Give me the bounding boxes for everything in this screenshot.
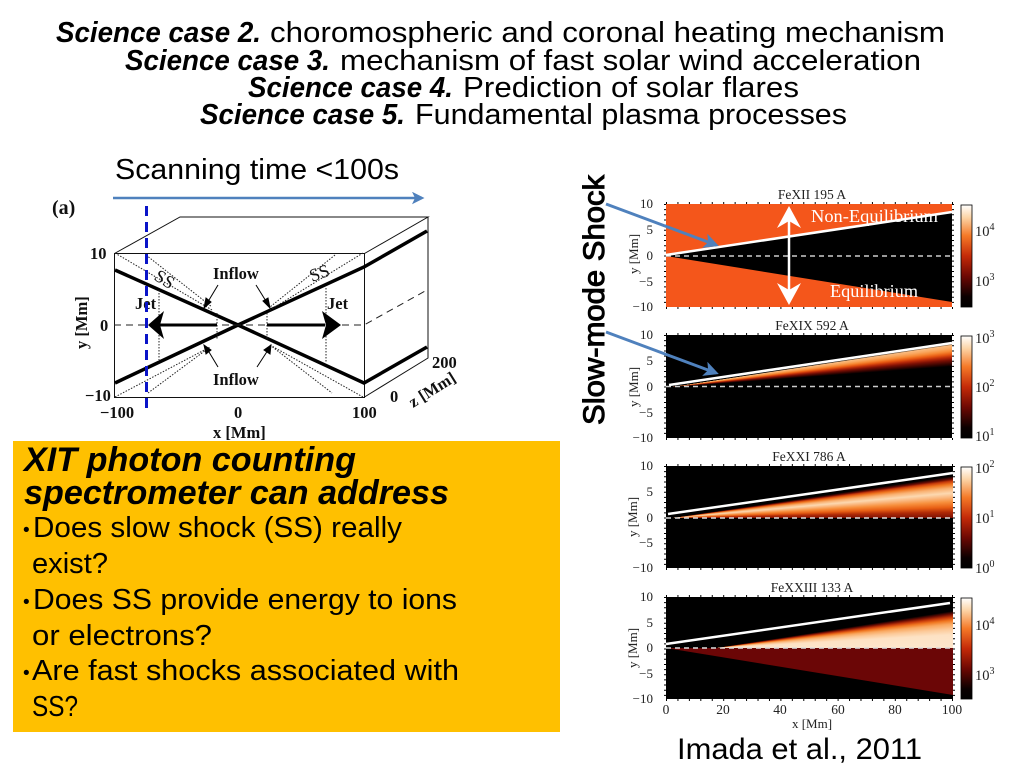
science case 3 text: mechanism of fast solar wind acceleration (340, 45, 921, 77)
inflow arrows (204, 285, 271, 367)
colour bar labels (975, 222, 994, 290)
colour bar labels: 4 (990, 616, 994, 627)
colour bar (961, 205, 972, 307)
y axis ticks: −10 (633, 430, 653, 445)
question 3 continuation: SS? (32, 691, 78, 723)
science case 2 label: Science case 2. (56, 17, 261, 49)
question 3: • (23, 663, 30, 684)
y axis ticks: 5 (646, 222, 653, 237)
y axis ticks: −10 (633, 691, 653, 706)
chart: FeXIX 592 A (626, 318, 994, 445)
science case 5 label: Science case 5. (200, 99, 405, 131)
midplane dashes (666, 647, 953, 649)
science case 3 label: Science case 3. (125, 45, 330, 77)
colour bar labels (975, 616, 994, 684)
diagram labels: Jet (135, 294, 157, 313)
chart title: FeXXI 786 A (772, 449, 846, 464)
colour bar labels: 10 (975, 618, 990, 634)
emission wedge (666, 466, 953, 518)
diagram labels: Jet (327, 294, 349, 313)
colour bar labels: 0 (990, 559, 994, 570)
x axis ticks: 0 (663, 702, 670, 717)
diagram labels (72, 244, 459, 442)
equilibrium label: Equilibrium (830, 281, 918, 301)
vertical label: slow-mode shock: Slow-mode Shock (578, 174, 611, 425)
midplane dashes (666, 386, 952, 388)
jet arrow left (148, 311, 217, 339)
heat map (666, 204, 952, 307)
chart title: FeXXIII 133 A (771, 580, 853, 595)
colour bar labels: 1 (990, 509, 994, 520)
y axis ticks: −5 (639, 535, 653, 550)
y axis ticks (633, 327, 653, 445)
y axis label: y [Mm] (625, 497, 640, 537)
colour bar labels: 10 (975, 429, 990, 445)
jet arrow right (267, 311, 341, 339)
x axis ticks (663, 702, 962, 717)
emission wedge (666, 597, 953, 648)
chart: FeXII 195 A (626, 187, 994, 314)
science case 2 text: choromospheric and coronal heating mechanism (270, 17, 945, 49)
y axis ticks: 0 (646, 379, 653, 394)
y axis ticks: 10 (640, 196, 653, 211)
diagram labels: −10 (85, 386, 111, 405)
question 1: Does slow shock (SS) really (33, 512, 403, 544)
blue dashed scan slit (145, 206, 148, 412)
colour bar labels: 3 (990, 329, 994, 340)
shock line (669, 343, 952, 385)
colour bar (961, 467, 972, 568)
lower red wedge (666, 648, 953, 695)
dashed midplane (114, 290, 427, 325)
chart: FeXXI 786 A (625, 449, 994, 577)
diagram labels: Inflow (213, 264, 259, 283)
y axis ticks: 5 (646, 353, 653, 368)
diagram labels: SS (151, 265, 178, 293)
colour bar labels: 3 (990, 272, 994, 283)
y axis ticks: 5 (646, 484, 653, 499)
non-equilibrium label: Non-Equilibrium (811, 206, 938, 226)
colour bar labels: 3 (990, 666, 994, 677)
colour bar labels: 10 (975, 511, 990, 527)
science case 5 text: Fundamental plasma processes (415, 99, 847, 131)
science case 4 label: Science case 4. (248, 72, 453, 104)
box outline (114, 217, 428, 398)
diagram labels: SS (307, 260, 332, 286)
diagram labels: 0 (100, 316, 108, 335)
chart title: FeXIX 592 A (775, 318, 849, 333)
question 2: Does SS provide energy to ions (33, 584, 457, 616)
equilibrium wedge (666, 212, 952, 302)
colour bar labels: 10 (975, 380, 990, 396)
y axis ticks: 0 (646, 510, 653, 525)
heat map (666, 466, 953, 568)
callout heading line 2: spectrometer can address (24, 474, 449, 512)
diagram labels: 10 (90, 244, 106, 263)
colour bar labels: 10 (975, 668, 990, 684)
y axis label: y [Mm] (626, 234, 641, 274)
x axis label: x [Mm] (792, 716, 832, 731)
y axis ticks: −5 (639, 666, 653, 681)
colour bar labels: 2 (990, 378, 994, 389)
y axis ticks: −10 (633, 299, 653, 314)
colour bar labels: 10 (975, 224, 990, 240)
heat map (666, 597, 953, 699)
title: science cases (56, 17, 945, 131)
shock line (666, 212, 952, 255)
x axis ticks: 60 (831, 702, 845, 717)
colour bar labels (975, 459, 994, 577)
arrow: shock pointer top (606, 204, 716, 245)
y axis ticks: −10 (633, 560, 653, 575)
arrow: shock pointer second (606, 332, 716, 373)
thick current sheet lines (115, 231, 427, 383)
colour bar labels: 10 (975, 331, 990, 347)
y axis ticks (633, 458, 653, 575)
diagram labels: y [Mm] (72, 296, 91, 349)
dotted shock guides (115, 253, 363, 397)
y axis ticks: 10 (640, 458, 653, 473)
diagram labels: 100 (352, 403, 377, 422)
shock line (666, 603, 950, 644)
colour bar labels: 2 (990, 459, 994, 470)
colour bar (961, 336, 972, 438)
midplane dashes (666, 517, 953, 519)
y axis ticks: 0 (646, 248, 653, 263)
question 3: Are fast shocks associated with (32, 655, 459, 687)
question 1: • (23, 520, 30, 541)
double arrow (777, 206, 801, 305)
y axis ticks: 10 (640, 589, 653, 604)
y axis ticks: −5 (639, 274, 653, 289)
colour bar labels: 4 (990, 222, 994, 233)
diagram labels: Inflow (213, 370, 259, 389)
y axis label: y [Mm] (625, 628, 640, 668)
citation: Imada et al., 2011 (677, 733, 922, 766)
scanning time label: Scanning time <100s (115, 154, 399, 186)
colour bar (961, 598, 972, 699)
x axis ticks: 40 (773, 702, 787, 717)
y axis ticks: 10 (640, 327, 653, 342)
y axis ticks (633, 196, 653, 314)
diagram labels: −100 (100, 403, 134, 422)
callout background (13, 441, 560, 732)
y axis ticks: 5 (646, 615, 653, 630)
panel label a: (a) (52, 197, 75, 219)
callout: XIT questions (13, 441, 560, 732)
midplane dashes (666, 255, 952, 257)
diagram: reconnection box (52, 197, 459, 442)
y axis ticks (633, 589, 653, 706)
callout heading: XIT photon counting (22, 441, 356, 479)
arrow: scan direction (113, 197, 422, 199)
diagram labels: 0 (390, 387, 398, 406)
colour bar labels: 10 (975, 274, 990, 290)
diagram labels: z [Mm] (405, 368, 459, 411)
question 2: • (23, 592, 30, 613)
colour bar labels: 10 (975, 561, 990, 577)
y axis label: y [Mm] (626, 367, 641, 407)
y axis ticks: 0 (646, 640, 653, 655)
y axis ticks: −5 (639, 405, 653, 420)
heat map (666, 335, 952, 438)
chart title: FeXII 195 A (778, 187, 846, 202)
shock line (668, 473, 953, 514)
question 1 continuation: exist? (32, 548, 108, 580)
emission wedge (666, 335, 952, 387)
colour bar labels: 1 (990, 427, 994, 438)
diagram labels: 200 (432, 353, 457, 372)
science case 4 text: Prediction of solar flares (463, 72, 799, 104)
x axis ticks: 20 (716, 702, 730, 717)
diagram labels: 0 (234, 403, 242, 422)
x axis ticks: 100 (942, 702, 962, 717)
colour bar labels (975, 329, 994, 445)
diagram labels: x [Mm] (213, 423, 266, 442)
x axis ticks: 80 (888, 702, 902, 717)
colour bar labels: 10 (975, 461, 990, 477)
question 2 continuation: or electrons? (32, 620, 212, 652)
chart: FeXXIII 133 A (625, 580, 994, 731)
